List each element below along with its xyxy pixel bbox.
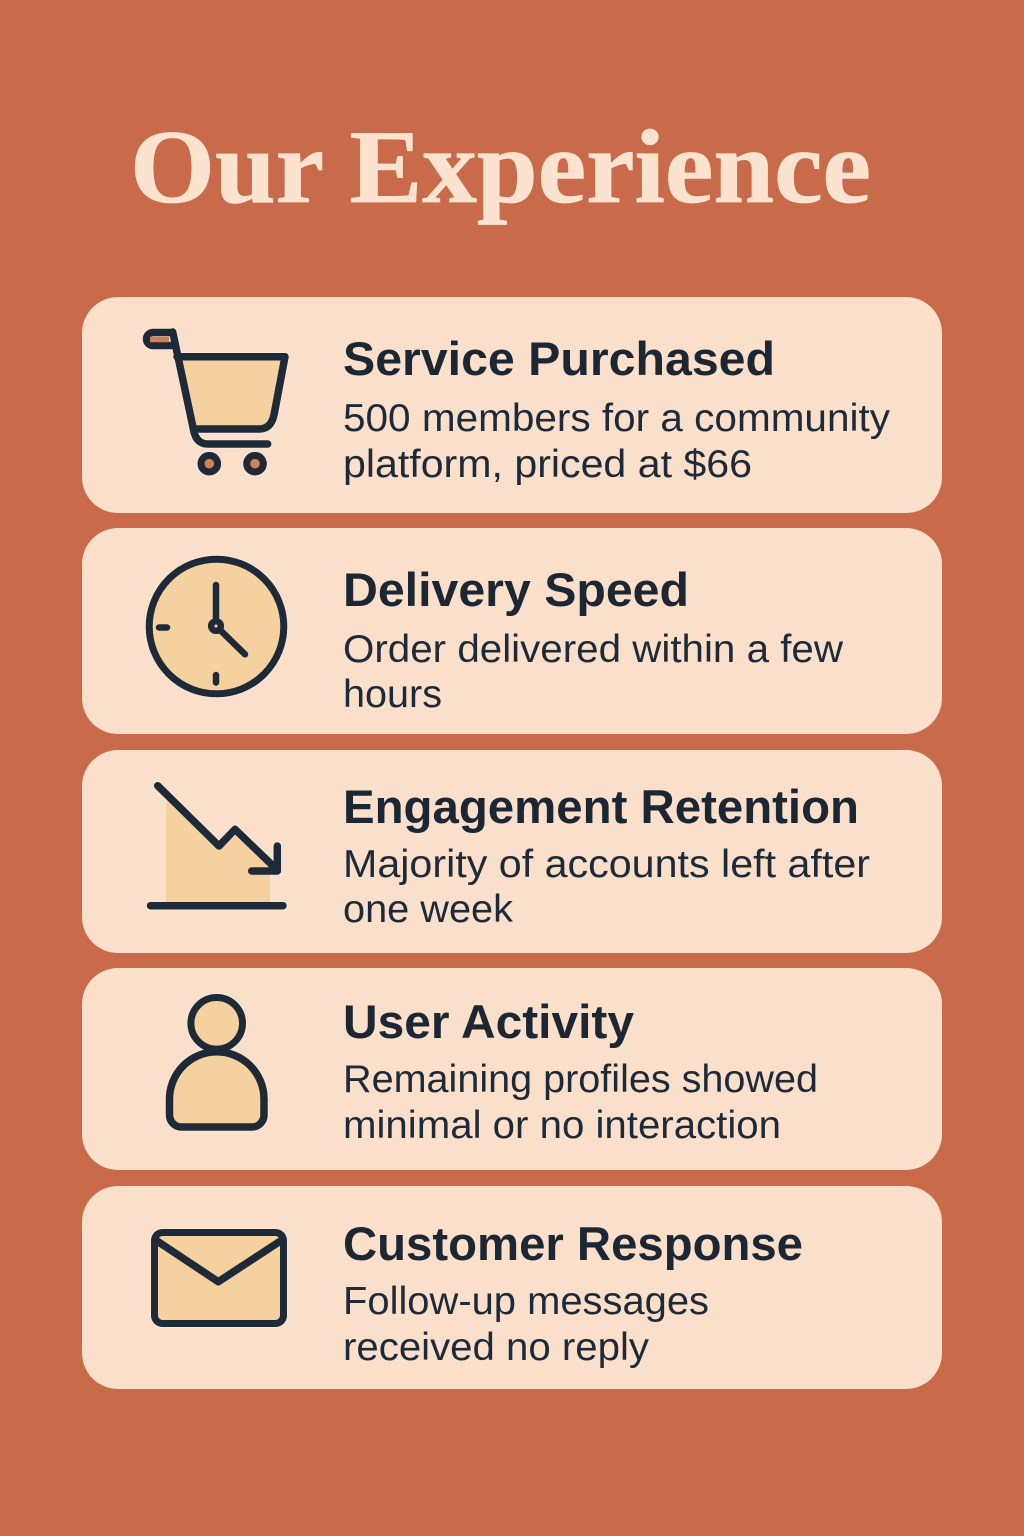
card background (82, 297, 942, 513)
description: 500 members for a community (343, 397, 891, 440)
panel: customer response (82, 1186, 942, 1389)
description: one week (343, 888, 514, 931)
heading: Engagement Retention (343, 780, 859, 833)
icon: clock (149, 559, 284, 694)
heading: User Activity (343, 995, 634, 1048)
description: Follow-up messages (343, 1280, 709, 1323)
title: Our Experience (130, 108, 871, 225)
card background (82, 750, 942, 953)
icon: shopping cart (146, 332, 285, 472)
description (343, 1280, 709, 1369)
description: minimal or no interaction (343, 1104, 781, 1147)
heading: Service Purchased (343, 332, 775, 385)
heading: Delivery Speed (343, 563, 689, 616)
icon: user (170, 998, 264, 1127)
description: Remaining profiles showed (343, 1058, 818, 1101)
card background (82, 968, 942, 1170)
description (343, 1058, 818, 1147)
description: Majority of accounts left after (343, 843, 870, 886)
panel: delivery speed (82, 528, 942, 734)
panel: engagement retention (82, 750, 942, 953)
panel: user activity (82, 968, 942, 1170)
icon: envelope (154, 1232, 284, 1324)
description (343, 843, 870, 931)
description: Order delivered within a few (343, 628, 844, 671)
description (343, 397, 891, 486)
heading: Customer Response (343, 1217, 803, 1270)
description: hours (343, 673, 442, 716)
description: platform, priced at $66 (343, 443, 752, 486)
description (343, 628, 844, 716)
card background (82, 1186, 942, 1389)
description: received no reply (343, 1326, 650, 1369)
panel: service purchased (82, 297, 942, 513)
card background (82, 528, 942, 734)
icon: declining chart (150, 786, 283, 906)
